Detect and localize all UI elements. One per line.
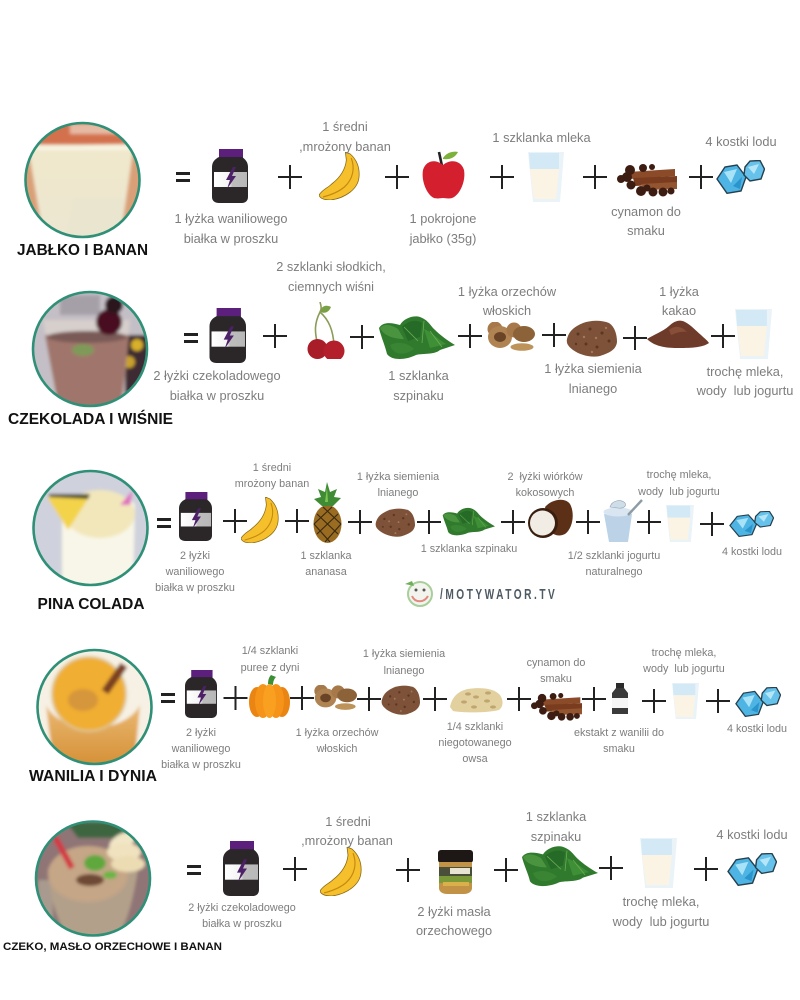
icon: protein jar: [210, 308, 246, 363]
icon: flaxseed: [567, 321, 617, 357]
label: walnuts: włoskich: [482, 303, 531, 318]
label: yogurt: naturalnego: [585, 566, 643, 578]
label: oats: 1/4 szklanki: [447, 721, 503, 733]
icon: ice cubes: [728, 853, 776, 885]
plus: [290, 686, 314, 710]
label: protein: białka w proszku: [170, 388, 264, 403]
photo: pumpkin smoothie: [35, 648, 155, 768]
equals sign: [161, 694, 175, 702]
plus: [385, 165, 409, 189]
photo: peanut butter smoothie: [33, 818, 153, 940]
label: milk: trochę mleka,: [623, 894, 699, 909]
plus: [223, 509, 247, 533]
plus: [458, 324, 482, 348]
label: protein: 2 łyżki czekoladowego: [188, 902, 296, 914]
plus: [711, 324, 735, 348]
icon: walnuts: [488, 322, 535, 351]
icon: logo face: [405, 581, 432, 606]
icon: banana: [241, 497, 278, 543]
label: protein: 1 łyżka waniliowego: [174, 211, 288, 226]
plus: [348, 510, 372, 534]
icon: ice cubes: [730, 511, 774, 536]
plus: [507, 687, 531, 711]
plus: [542, 323, 566, 347]
icon: ice cubes: [736, 687, 781, 716]
icon: spinach: [443, 508, 495, 535]
label: protein: białka w proszku: [202, 918, 282, 930]
label: milk: wody lub jogurtu: [642, 663, 725, 675]
plus: [263, 324, 287, 348]
plus: [278, 165, 302, 189]
icon: banana: [319, 152, 359, 200]
label: flaxseed: lnianego: [569, 381, 617, 396]
plus: [694, 857, 718, 881]
icon: pineapple: [314, 482, 342, 543]
label: banana: ,mrożony banan: [299, 139, 391, 154]
icon: milk glass: [672, 683, 699, 719]
label: walnuts: 1 łyżka orzechów: [296, 727, 379, 739]
photo: apple banana smoothie: [20, 120, 145, 240]
label: cocoa: kakao: [662, 303, 696, 318]
plus: [417, 510, 441, 534]
icon: vanilla bottle: [612, 683, 628, 714]
icon: walnuts: [314, 685, 357, 710]
label: protein: białka w proszku: [161, 759, 241, 771]
title: PINA COLADA: [38, 596, 145, 613]
label: protein: białka w proszku: [155, 582, 235, 594]
recipe row 2: chocolate and cherry: [8, 259, 793, 428]
label: walnuts: 1 łyżka orzechów: [458, 284, 557, 299]
label: pineapple: 1 szklanka: [300, 550, 352, 562]
label: peanut butter: 2 łyżki masła: [417, 904, 492, 919]
label: cinnamon: cynamon do: [611, 204, 681, 219]
plus: [423, 687, 447, 711]
label: apple: 1 pokrojone: [410, 211, 476, 226]
plus: [642, 689, 666, 713]
icon: milk glass: [666, 505, 694, 542]
plus: [700, 512, 724, 536]
equals sign: [176, 174, 190, 180]
icon: coconut: [528, 500, 573, 538]
plus: [396, 858, 420, 882]
label: flaxseed: lnianego: [384, 665, 424, 677]
recipe row 5: chocolate, peanut butter, banana: [3, 809, 788, 953]
label: ice: 4 kostki lodu: [716, 827, 788, 842]
icon: protein jar: [179, 492, 212, 541]
label: milk: wody lub jogurtu: [696, 383, 793, 398]
label: oats: owsa: [462, 753, 488, 765]
label: ice: 4 kostki lodu: [705, 134, 777, 149]
title: WANILIA I DYNIA: [29, 768, 157, 785]
label: protein: 2 łyżki czekoladowego: [153, 368, 281, 383]
label: ice: 4 kostki lodu: [722, 546, 782, 558]
logo: motywator.tv: [405, 581, 555, 606]
plus: [689, 165, 713, 189]
icon: spinach: [522, 846, 598, 886]
icon: milk glass: [640, 838, 677, 888]
label: protein: 2 łyżki: [186, 727, 216, 739]
label: pumpkin: puree z dyni: [241, 662, 299, 674]
label: milk: wody lub jogurtu: [637, 486, 720, 498]
label: banana: 1 średni: [325, 814, 371, 829]
label: ice: 4 kostki lodu: [727, 723, 787, 735]
icon: spinach: [379, 316, 455, 359]
label: coconut: kokosowych: [516, 487, 574, 499]
label: protein: 2 łyżki: [180, 550, 210, 562]
label: cinnamon: smaku: [540, 673, 572, 685]
plus: [582, 687, 606, 711]
plus: [494, 858, 518, 882]
label: coconut: 2 łyżki wiórków: [508, 471, 583, 483]
label: banana: mrożony banan: [235, 478, 309, 490]
recipe row 3: pina colada: [30, 462, 782, 613]
label: protein: waniliowego: [171, 743, 230, 755]
label: cinnamon: smaku: [627, 223, 665, 238]
label: vanilla: ekstakt z wanilii do: [574, 727, 664, 739]
label: cocoa: 1 łyżka: [659, 284, 700, 299]
label: milk: trochę mleka,: [652, 647, 716, 659]
label: banana: 1 średni: [322, 119, 368, 134]
icon: cinnamon: [617, 164, 677, 196]
icon: cocoa: [647, 321, 709, 348]
plus: [623, 326, 647, 350]
icon: oats: [450, 688, 503, 712]
plus: [637, 510, 661, 534]
plus: [501, 510, 525, 534]
label: flaxseed: 1 łyżka siemienia: [363, 648, 445, 660]
icon: pumpkin: [249, 675, 290, 718]
icon: milk glass: [735, 309, 772, 359]
label: spinach: 1 szklanka: [388, 368, 450, 383]
photo: pina colada smoothie: [30, 468, 150, 590]
equals sign: [184, 334, 198, 342]
label: spinach: 1 szklanka: [526, 809, 587, 824]
icon: milk glass: [528, 152, 564, 202]
recipe row 4: vanilla and pumpkin: [29, 645, 787, 785]
equals sign: [157, 520, 171, 526]
label: vanilla: smaku: [603, 743, 635, 755]
title: CZEKOLADA I WIŚNIE: [8, 409, 173, 428]
label: spinach: szpinaku: [531, 829, 581, 844]
title: CZEKO, MASŁO ORZECHOWE I BANAN: [3, 941, 222, 953]
plus: [224, 686, 248, 710]
icon: yogurt: [604, 500, 642, 542]
label: spinach: szpinaku: [393, 388, 444, 403]
icon: protein jar: [185, 670, 217, 718]
label: flaxseed: 1 łyżka siemienia: [544, 361, 643, 376]
label: milk: 1 szklanka mleka: [492, 130, 591, 145]
label: milk: trochę mleka,: [707, 364, 783, 379]
icon: protein jar: [223, 841, 259, 896]
icon: peanut butter jar: [438, 850, 473, 894]
plus: [576, 510, 600, 534]
title: JABŁKO I BANAN: [17, 242, 148, 259]
label: pumpkin: 1/4 szklanki: [242, 645, 298, 657]
icon: flaxseed: [382, 686, 420, 715]
label: spinach: 1 szklanka szpinaku: [421, 543, 517, 555]
plus: [357, 687, 381, 711]
icon: ice cubes: [717, 160, 764, 193]
label: flaxseed: lnianego: [378, 487, 418, 499]
label: yogurt: 1/2 szklanki jogurtu: [568, 550, 660, 562]
icon: banana: [320, 847, 361, 896]
label: cherries: 2 szklanki słodkich,: [276, 259, 386, 274]
label: banana: ,mrożony banan: [301, 833, 393, 848]
label: apple: jabłko (35g): [409, 231, 476, 246]
label: walnuts: włoskich: [316, 743, 357, 755]
photo: chocolate cherry smoothie: [30, 290, 150, 410]
label: flaxseed: 1 łyżka siemienia: [357, 471, 439, 483]
plus: [490, 165, 514, 189]
icon: cinnamon: [531, 693, 582, 721]
recipe row 1: apple and banana: [17, 119, 777, 259]
plus: [706, 689, 730, 713]
label: protein: białka w proszku: [184, 231, 278, 246]
plus: [599, 856, 623, 880]
icon: apple: [423, 152, 464, 198]
plus: [350, 325, 374, 349]
logo text: /MOTYWATOR.TV: [440, 586, 555, 602]
plus: [583, 165, 607, 189]
label: protein: waniliowego: [165, 566, 224, 578]
label: pineapple: ananasa: [305, 566, 347, 578]
icon: cherries: [308, 302, 344, 362]
label: milk: wody lub jogurtu: [612, 914, 709, 929]
label: peanut butter: orzechowego: [416, 923, 492, 938]
label: banana: 1 średni: [253, 462, 291, 474]
icon: flaxseed: [376, 509, 415, 537]
plus: [283, 857, 307, 881]
plus: [285, 509, 309, 533]
equals sign: [187, 866, 201, 874]
label: cherries: ciemnych wiśni: [288, 279, 374, 294]
label: cinnamon: cynamon do: [527, 657, 585, 669]
label: milk: trochę mleka,: [647, 469, 711, 481]
icon: protein jar: [212, 149, 248, 203]
label: oats: niegotowanego: [438, 737, 512, 749]
